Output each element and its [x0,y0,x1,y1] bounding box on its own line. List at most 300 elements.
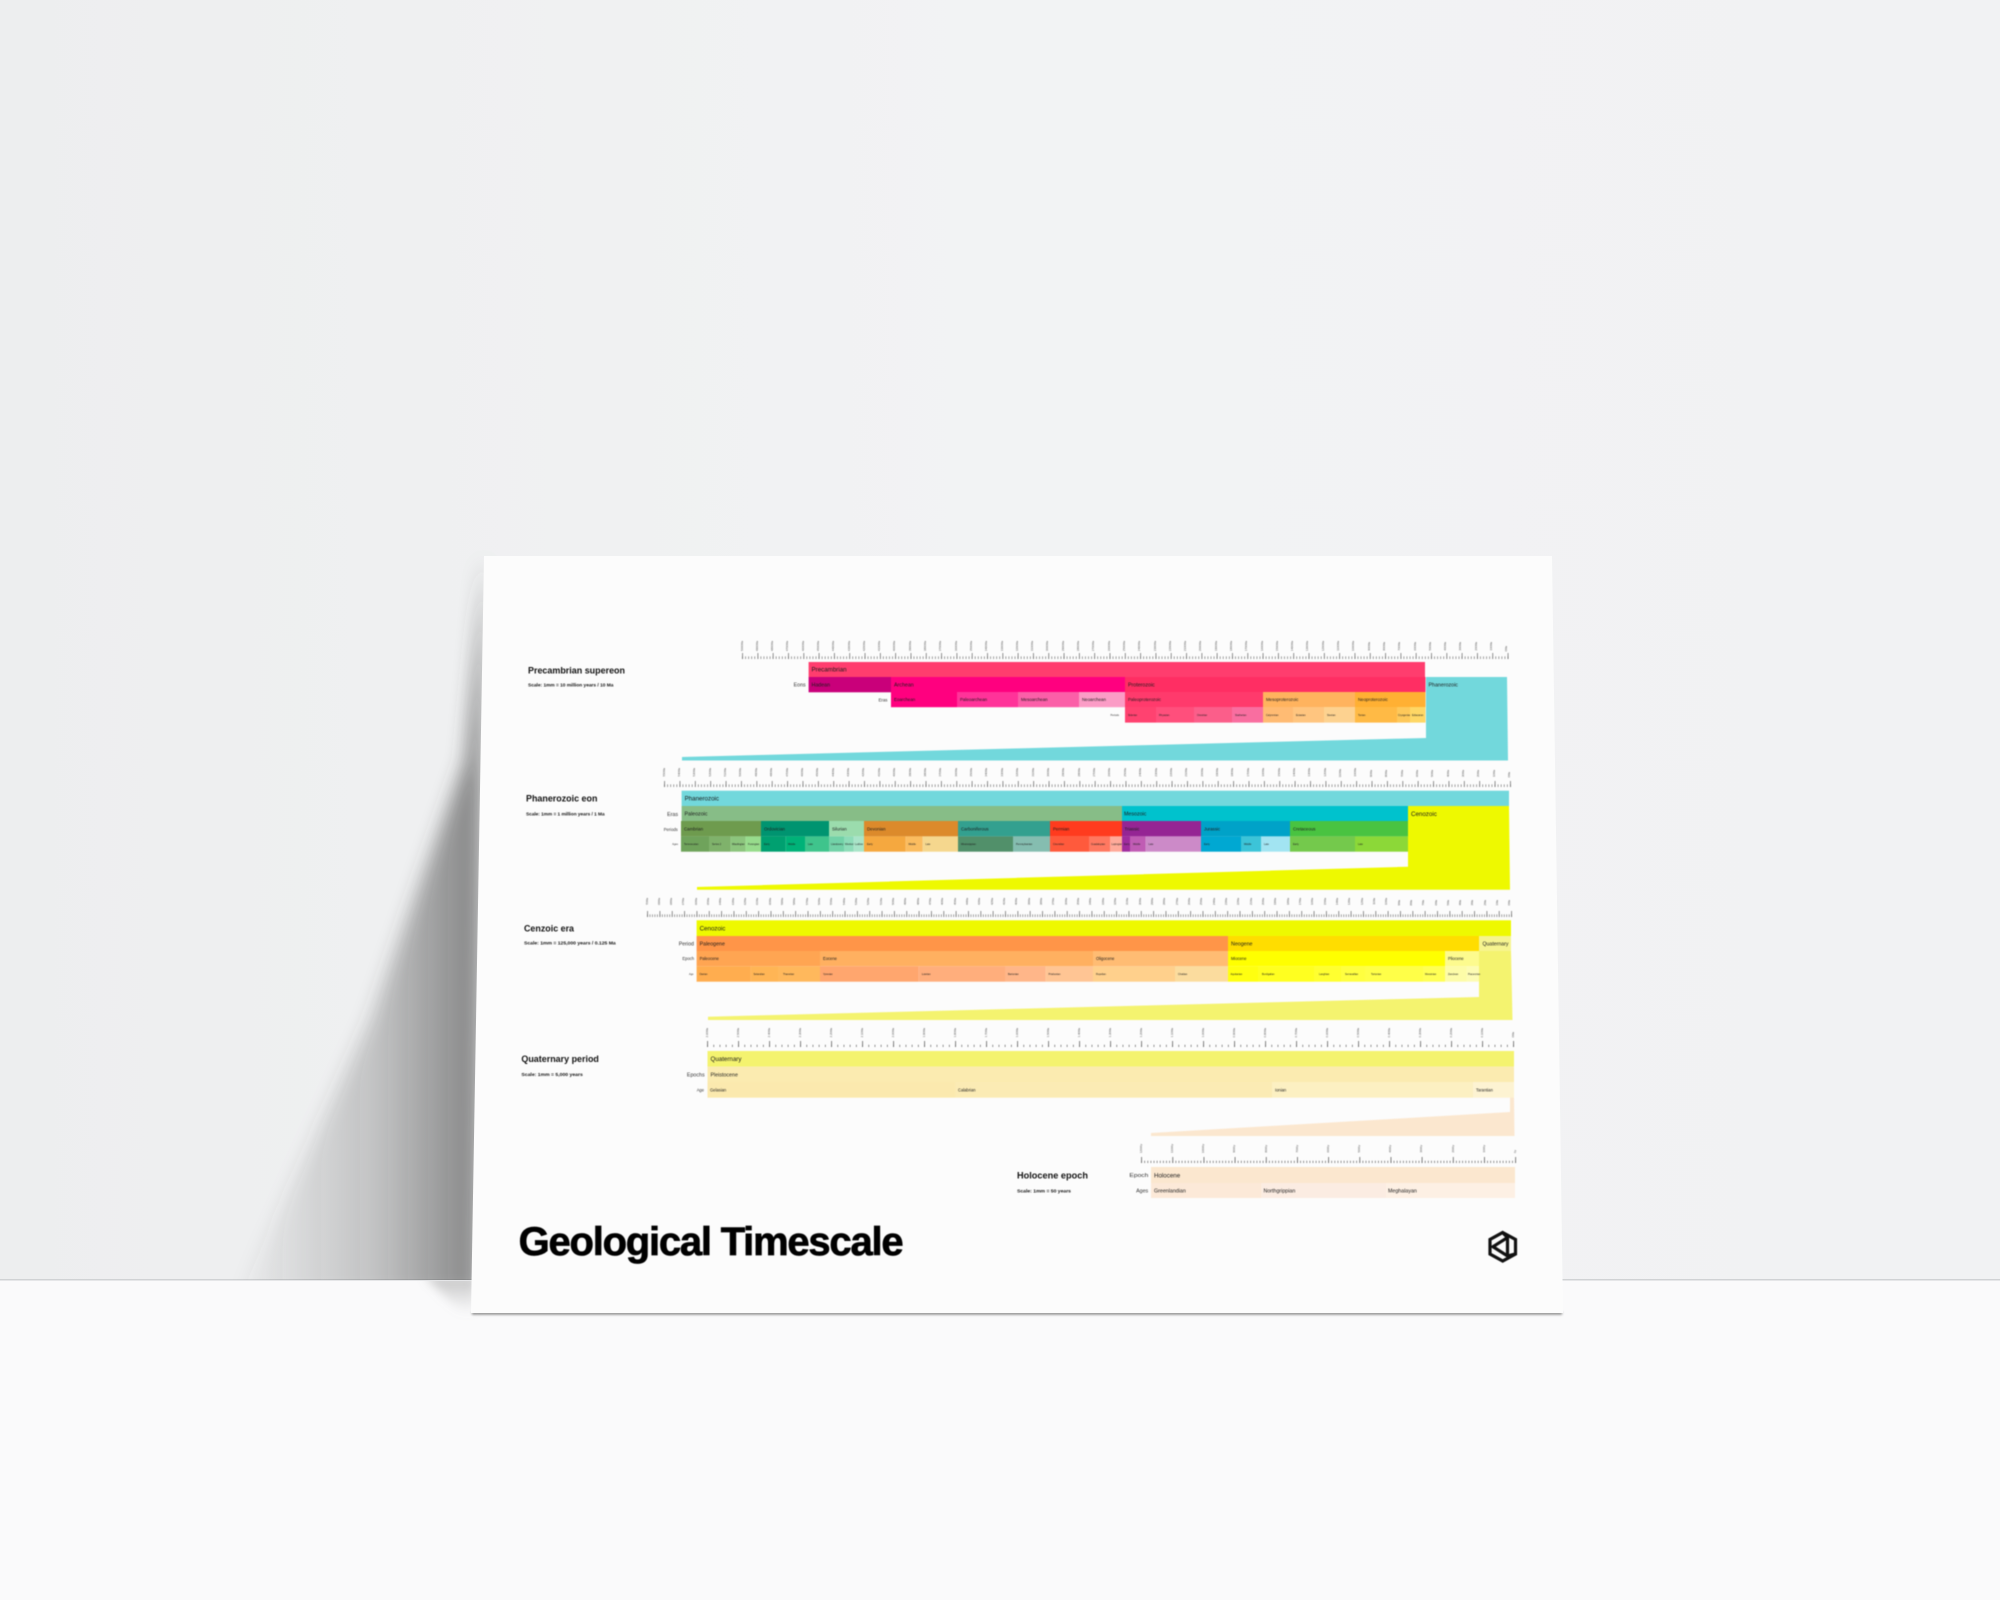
ruler: Cenozoic scale: 0Ma [1507,900,1511,905]
ruler: Quaternary scale: 0.70Ma [1294,1028,1298,1037]
ruler: Cenozoic scale: 30Ma [1138,898,1142,905]
ruler: Precambrian scale: 2900Ma [1061,641,1065,651]
row: eons: Hadean [812,682,830,688]
ruler: Cenozoic scale: 56Ma [817,898,821,905]
panel: Quaternary period [521,1051,1514,1136]
ruler: Precambrian scale: 300Ma [1458,642,1462,651]
row: eras [878,692,1426,707]
ruler: Phanerozoic scale: 490Ma [754,768,758,777]
ruler: Precambrian scale: 4300Ma [847,641,851,651]
ruler: Precambrian scale: 2400Ma [1137,641,1141,651]
ruler: Phanerozoic scale: 480Ma [769,768,773,777]
ruler: Cenozoic scale: 17Ma [1298,898,1302,905]
ruler: Cenozoic scale: 32Ma [1113,898,1117,905]
row: periods: Ectasian [1296,714,1306,717]
row: periods: Silurian [832,826,847,831]
ruler: Precambrian scale: 1800Ma [1229,641,1233,651]
ruler: Precambrian scale: 4000Ma [892,641,896,651]
ruler: Phanerozoic scale: 320Ma [1015,768,1019,777]
ruler: Precambrian scale: 1600Ma [1260,641,1264,651]
ruler: Precambrian scale: 500Ma [1428,642,1432,651]
ruler: Quaternary scale: 1.70Ma [984,1028,988,1037]
ruler: Quaternary scale: 0Ma [1511,1032,1515,1037]
ruler: Cenozoic scale: 37Ma [1051,898,1055,905]
row: eras: Paleozoic [684,812,708,818]
row: ages: Priabonian [1048,973,1061,976]
ruler: Quaternary scale: 1.20Ma [1139,1028,1143,1037]
row: ages: Ludlow [855,843,863,846]
ruler: Cenozoic scale: 40Ma [1014,898,1018,905]
ruler: Phanerozoic scale: 20Ma [1476,770,1480,777]
row: eras: Eras [878,697,888,702]
ruler: Precambrian scale: 600Ma [1413,642,1417,651]
ruler: Phanerozoic scale: 300Ma [1046,768,1050,777]
ruler: Phanerozoic scale: 330Ma [1000,768,1004,777]
floor background [0,1280,2000,1600]
poster bottom shadow [472,1312,1562,1314]
ruler: Phanerozoic scale: 200Ma [1200,768,1204,777]
ruler: Phanerozoic scale: 500Ma [738,768,742,777]
row: periods: Rhyacian [1159,714,1170,717]
row: ages: Zanclean [1448,973,1459,976]
ruler: Phanerozoic scale: 110Ma [1338,769,1342,777]
ruler: Phanerozoic scale: 130Ma [1307,768,1311,777]
ruler: Precambrian scale: 4600Ma [801,641,805,651]
heading: Holocene epoch: Holocene epoch [1017,1170,1088,1181]
ruler: Cenozoic scale: 35Ma [1076,898,1080,905]
row: ages [672,836,1408,852]
ruler: Quaternary scale: 1.00Ma [1201,1028,1205,1037]
row: ages: Northgrippian [1264,1189,1295,1195]
row: ages: Middle [908,843,916,846]
ruler: Precambrian scale: 3100Ma [1030,641,1034,651]
row: ages: Ionian [1275,1087,1287,1092]
ruler: Cenozoic scale: 70Ma [644,898,648,905]
ruler: Cenozoic scale: 57Ma [805,898,809,905]
ruler: Quaternary scale: 0.80Ma [1263,1028,1267,1037]
row: ages: Burdigalian [1262,973,1275,976]
row: eons [794,677,1426,692]
row: ages: Terreneuvian [684,843,699,846]
ruler: Holocene scale: 7000y [1295,1145,1299,1153]
ruler: Phanerozoic scale: 240Ma [1138,768,1142,777]
row: ages: Piacenzian [1468,973,1481,976]
ruler: Precambrian scale: 3400Ma [984,641,988,651]
row: periods: Carboniferous [961,826,989,831]
scale note: Precambrian: Scale: 1mm = 10 million years / 10 Ma [528,683,614,688]
row: ages: Late [926,843,931,846]
row: periods: Statherian [1235,714,1247,717]
ruler: Precambrian scale: 4400Ma [831,641,835,651]
ruler: Precambrian scale: 3500Ma [969,641,973,651]
scale note: Cenozoic: Scale: 1mm = 125,000 years / 0.125 Ma [524,941,616,946]
ruler: Precambrian scale: 200Ma [1474,642,1478,651]
ruler: Cenozoic scale: 61Ma [755,898,759,905]
ruler: Precambrian scale: 1900Ma [1214,641,1218,651]
ruler: Phanerozoic scale: 280Ma [1077,768,1081,777]
row: ages: Late [808,843,813,846]
ruler: Cenozoic scale: 44Ma [965,898,969,905]
ruler: Cenozoic scale: 47Ma [928,898,932,905]
ruler: Quaternary scale: 1.60Ma [1015,1028,1019,1037]
ruler: Cenozoic scale: 25Ma [1199,898,1203,905]
row: periods: Permian [1053,826,1070,831]
ruler: Phanerozoic scale: 210Ma [1184,768,1188,777]
row: epochs: Epochs [687,1072,705,1078]
ruler: Precambrian scale: 900Ma [1367,642,1371,651]
ruler: Cenozoic scale: 18Ma [1286,898,1290,905]
wall background [0,0,2000,1280]
ruler: Precambrian scale: 3700Ma [938,641,942,651]
ruler: Phanerozoic scale: 380Ma [923,768,927,777]
ruler: Phanerozoic scale: 270Ma [1092,768,1096,777]
ruler: Precambrian scale: 1000Ma [1351,641,1355,651]
ruler: Phanerozoic scale: 100Ma [1353,768,1357,777]
ruler: Phanerozoic scale: 340Ma [984,768,988,777]
ruler: Cenozoic scale: 34Ma [1088,898,1092,905]
funnel: Quaternary zoom wedge [708,936,1512,1020]
ruler: Cenozoic scale: 14Ma [1335,898,1339,905]
ruler: Cenozoic scale: 64Ma [718,898,722,905]
ruler: Cenozoic scale: 22Ma [1236,898,1240,905]
heading: Phanerozoic eon: Phanerozoic eon [526,793,598,804]
row: ages: Miaolingian [732,843,745,846]
ruler: Phanerozoic scale: 420Ma [861,768,865,777]
ruler: Precambrian scale: 400Ma [1443,642,1447,651]
funnel: Quaternary zoom wedge: Quaternary [1482,941,1509,947]
row: periods [664,821,1408,836]
ruler: Phanerozoic scale: 120Ma [1323,768,1327,777]
heading: Precambrian supereon: Precambrian supereon [528,665,625,676]
ruler: Phanerozoic scale: 450Ma [815,768,819,777]
row: ages: Tortonian [1371,973,1382,976]
row: periods: Siderian [1128,714,1138,717]
ruler: Quaternary scale: 1.50Ma [1046,1028,1050,1037]
ruler: Precambrian scale: 800Ma [1382,642,1386,651]
panel: Phanerozoic eon [526,791,1510,890]
row: ages: Early [1124,843,1130,846]
ruler: Phanerozoic scale: 230Ma [1154,768,1158,777]
row: ages: Greenlandian [1154,1189,1186,1195]
ruler: Precambrian scale: 5000Ma [740,641,744,651]
row: Precambrian supereon bar: Precambrian [812,667,847,674]
row: epoch: Holocene [1154,1172,1181,1179]
ruler: Precambrian scale [740,640,1510,660]
ruler: Phanerozoic scale: 410Ma [877,768,881,777]
row: ages: Chattian [1178,973,1188,976]
row: ages: Middle [788,843,796,846]
row: ages: Gelasian [710,1087,727,1092]
ruler: Phanerozoic scale: 460Ma [800,768,804,777]
row: ages: Ypresian [823,973,833,976]
ruler: Precambrian scale: 2100Ma [1183,641,1187,651]
row: Phanerozoic eon bar [682,791,1509,806]
ruler: Cenozoic scale: 15Ma [1323,898,1327,905]
ruler: Precambrian scale: 1700Ma [1244,641,1248,651]
row: ages: Meghalayan [1388,1189,1417,1195]
ruler: Phanerozoic scale: 350Ma [969,768,973,777]
ruler: Phanerozoic scale: 510Ma [723,768,727,777]
row: periods: Periods [1111,714,1120,717]
row: periods: Ediacaran [1412,714,1424,717]
heading: Cenzoic era: Cenzoic era [524,923,575,934]
row: Precambrian supereon bar [809,662,1425,677]
ruler: Quaternary scale: 0.20Ma [1449,1028,1453,1037]
ruler: Holocene scale: 12000y [1139,1144,1143,1153]
row: Quaternary period bar [708,1051,1514,1067]
ruler: Cenozoic scale: 58Ma [792,898,796,905]
ruler: Precambrian scale: 2700Ma [1091,641,1095,651]
row: epochs: Miocene [1231,956,1247,961]
row: periods: Jurassic [1204,826,1221,831]
ruler: Precambrian scale: 3200Ma [1015,641,1019,651]
row: ages: Age [689,973,694,976]
ruler: Phanerozoic scale: 50Ma [1430,770,1434,777]
ruler: Cenozoic scale: 4Ma [1458,900,1462,905]
row: ages: Late [1264,843,1269,846]
ruler: Quaternary scale: 0.60Ma [1325,1028,1329,1037]
row: epoch [1129,1167,1515,1183]
row: ages: Langhian [1319,973,1330,976]
ruler: Cenozoic scale: 60Ma [768,898,772,905]
ruler: Phanerozoic scale: 10Ma [1492,770,1496,777]
ruler: Holocene scale: 5000y [1357,1145,1361,1153]
ruler: Quaternary scale: 0.40Ma [1387,1028,1391,1037]
row: ages: Tarantian [1476,1087,1494,1092]
ruler: Cenozoic scale: 10Ma [1384,898,1388,905]
row: ages: Early [867,843,873,846]
row: eras: Neoarchean [1082,697,1106,702]
ruler: Holocene scale: 2000y [1451,1145,1455,1153]
row: eras: Mesozoic [1124,812,1147,818]
ruler: Quaternary scale: 2.20Ma [829,1028,833,1037]
ruler: Phanerozoic scale: 60Ma [1415,770,1419,777]
row: ages [689,966,1481,982]
ruler: Cenozoic scale: 27Ma [1175,898,1179,905]
ruler: Precambrian scale: 1200Ma [1321,641,1325,651]
panel: Cenozoic era [524,920,1512,1020]
ruler: Precambrian scale: 100Ma [1489,642,1493,651]
ruler: Cenozoic scale: 41Ma [1002,898,1006,905]
ruler: Phanerozoic scale [662,768,1512,788]
ruler: Precambrian scale: 2200Ma [1168,641,1172,651]
ruler: Quaternary scale: 2.30Ma [798,1028,802,1037]
row: ages: Series 2 [712,843,722,846]
row: periods: Triassic [1124,826,1140,831]
ruler: Quaternary scale: 0.90Ma [1232,1028,1236,1037]
row: ages: Danian [700,973,708,976]
row: ages: Aquitanian [1230,973,1243,976]
ruler: Holocene scale: 9000y [1232,1145,1236,1153]
row: ages: Middle [1133,843,1141,846]
ruler: Cenozoic scale: 2Ma [1483,900,1487,905]
row: periods: Orosirian [1197,714,1208,717]
row: periods: Devonian [867,826,886,831]
row: ages [1136,1183,1515,1198]
row: epochs [682,951,1479,966]
ruler: Cenozoic scale: 19Ma [1273,898,1277,905]
row: ages: Ages [1136,1188,1149,1194]
funnel: Cenozoic zoom wedge [697,806,1510,890]
row: ages: Age [697,1087,705,1092]
ruler: Cenozoic scale: 3Ma [1470,900,1474,905]
row: periods: Cretaceous [1293,826,1316,831]
ruler: Precambrian scale: 700Ma [1397,642,1401,651]
ruler: Quaternary scale: 0.10Ma [1480,1028,1484,1037]
row: eons: Archean [894,682,914,688]
ruler: Cenozoic scale: 11Ma [1372,898,1376,905]
row: Cenozoic era bar: Cenozoic [700,926,725,932]
row: eras: Eras [667,812,678,818]
ruler: Phanerozoic scale: 80Ma [1384,770,1388,777]
funnel: Phanerozoic zoom wedge: Phanerozoic [1428,683,1458,689]
ruler: Phanerozoic scale: 470Ma [784,768,788,777]
row: ages: Furongian [748,843,760,846]
ruler: Precambrian scale: 2300Ma [1153,641,1157,651]
ruler: Phanerozoic scale: 250Ma [1123,768,1127,777]
ruler: Phanerozoic scale: 370Ma [938,768,942,777]
ruler: Cenozoic scale: 66Ma [694,898,698,905]
row: periods: Stenian [1327,714,1336,717]
funnel: Cenozoic zoom wedge: Cenozoic [1411,811,1437,818]
ruler: Cenozoic scale: 24Ma [1212,898,1216,905]
row: periods: Neogene [1231,941,1253,947]
funnel: Holocene zoom wedge [1151,1097,1514,1136]
ruler: Cenozoic scale: 16Ma [1310,898,1314,905]
ruler: Precambrian scale: 3900Ma [908,641,912,651]
ruler: Cenozoic scale: 42Ma [990,898,994,905]
ruler: Cenozoic scale: 43Ma [977,898,981,905]
ruler: Holocene scale [1139,1144,1517,1164]
panel: Precambrian supereon [528,662,1508,760]
ruler: Cenozoic scale: 7Ma [1421,900,1425,905]
ruler: Holocene scale: 0y [1513,1150,1517,1153]
ruler: Cenozoic scale: 67Ma [681,898,685,905]
row: epochs: Paleocene [700,956,720,961]
row: eras: Eoarchean [894,697,916,702]
row: epoch: Epoch [1129,1173,1148,1179]
ruler: Cenozoic scale: 52Ma [866,898,870,905]
ruler: Quaternary scale: 0.30Ma [1418,1028,1422,1037]
ruler: Cenozoic scale: 9Ma [1397,900,1401,905]
ruler: Precambrian scale: 4200Ma [862,641,866,651]
row: periods: Paleogene [700,941,725,947]
ruler: Phanerozoic scale: 220Ma [1169,768,1173,777]
ruler: Cenozoic scale [644,898,1513,918]
row: ages: Early [1204,843,1210,846]
row: epochs: Pliocene [1448,956,1464,961]
ruler: Cenozoic scale: 49Ma [903,898,907,905]
floor line [0,1279,2000,1280]
ruler: Precambrian scale: 1100Ma [1336,641,1340,651]
ruler: Cenozoic scale: 68Ma [669,898,673,905]
ruler: Phanerozoic scale: 290Ma [1061,768,1065,777]
ruler: Precambrian scale: 3600Ma [954,641,958,651]
row: eras: Paleoproterozoic [1128,697,1162,702]
ruler: Precambrian scale: 3000Ma [1045,641,1049,651]
ruler: Cenozoic scale: 5Ma [1446,900,1450,905]
ruler: Cenozoic scale: 63Ma [731,898,735,905]
row: ages: Lutetian [922,973,931,976]
row: eons: Eons [794,682,806,688]
ruler: Quaternary scale: 2.10Ma [860,1028,864,1037]
ruler: Precambrian scale: 4900Ma [755,641,759,651]
ruler: Cenozoic scale: 65Ma [706,898,710,905]
scale note: Phanerozoic: Scale: 1mm = 1 million years / 1 Ma [526,811,605,816]
ruler: Holocene scale: 1000y [1482,1145,1486,1153]
ruler: Cenozoic scale: 51Ma [879,898,883,905]
ruler: Cenozoic scale: 36Ma [1064,898,1068,905]
ruler: Cenozoic scale: 8Ma [1409,900,1413,905]
ruler: Cenozoic scale: 12Ma [1360,898,1364,905]
ruler: Quaternary scale: 1.10Ma [1170,1028,1174,1037]
ruler: Cenozoic scale: 26Ma [1187,898,1191,905]
ruler: Cenozoic scale: 54Ma [842,898,846,905]
panel: Holocene epoch [1017,1167,1515,1198]
ruler: Cenozoic scale: 33Ma [1101,898,1105,905]
ruler: Precambrian scale: 1400Ma [1290,641,1294,651]
ruler: Precambrian scale: 1500Ma [1275,641,1279,651]
ruler: Phanerozoic scale: 170Ma [1246,768,1250,777]
ruler: Phanerozoic scale: 550Ma [662,768,666,777]
row: ages: Early [1293,843,1299,846]
row: eras: Mesoproterozoic [1266,697,1299,702]
ruler: Holocene scale: 6000y [1326,1145,1330,1153]
ruler: Cenozoic scale: 59Ma [780,898,784,905]
ruler: Cenozoic scale: 55Ma [829,898,833,905]
row: epochs: Eocene [823,956,838,961]
row: ages: Pennsylvanian [1016,843,1033,846]
row: ages: Guadalupian [1091,843,1106,846]
ruler: Precambrian scale: 4800Ma [770,641,774,651]
ruler: Cenozoic scale: 13Ma [1347,898,1351,905]
ruler: Precambrian scale: 4100Ma [877,641,881,651]
ruler: Cenozoic scale: 38Ma [1039,898,1043,905]
ruler: Precambrian scale: 2000Ma [1198,641,1202,651]
ruler: Precambrian scale: 1300Ma [1305,641,1309,651]
ruler: Quaternary scale: 1.30Ma [1108,1028,1112,1037]
heading: Quaternary period: Quaternary period [521,1054,599,1065]
ruler: Phanerozoic scale: 90Ma [1369,770,1373,777]
row: epochs: Oligocene [1096,956,1115,961]
ruler: Precambrian scale: 2800Ma [1076,641,1080,651]
funnel: Phanerozoic zoom wedge [682,677,1508,760]
row: eras [667,806,1408,821]
row: epochs: Epoch [682,956,695,961]
row: periods: Tonian [1358,714,1366,717]
row: periods: Ordovician [764,826,786,831]
ruler: Cenozoic scale: 21Ma [1249,898,1253,905]
ruler: Cenozoic scale: 29Ma [1150,898,1154,905]
row: ages: Late [1358,843,1363,846]
ruler: Cenozoic scale: 20Ma [1261,898,1265,905]
row: ages: Late [1148,843,1154,846]
ruler: Holocene scale: 3000y [1419,1145,1423,1153]
ruler: Phanerozoic scale: 30Ma [1461,770,1465,777]
row: periods [679,936,1479,951]
ruler: Cenozoic scale: 39Ma [1027,898,1031,905]
scale note: Quaternary: Scale: 1mm = 5,000 years [521,1072,583,1077]
scale note: Holocene: Scale: 1mm = 50 years [1017,1188,1071,1193]
ruler: Precambrian scale: 3300Ma [1000,641,1004,651]
row: ages: Calabrian [958,1087,976,1092]
row: periods [1111,707,1426,723]
ruler: Cenozoic scale: 69Ma [657,898,661,905]
ruler: Precambrian scale: 0Ma [1504,646,1508,651]
ruler: Cenozoic scale: 28Ma [1162,898,1166,905]
row: periods: Calymmian [1266,714,1279,717]
ruler: Holocene scale: 8000y [1264,1145,1268,1153]
